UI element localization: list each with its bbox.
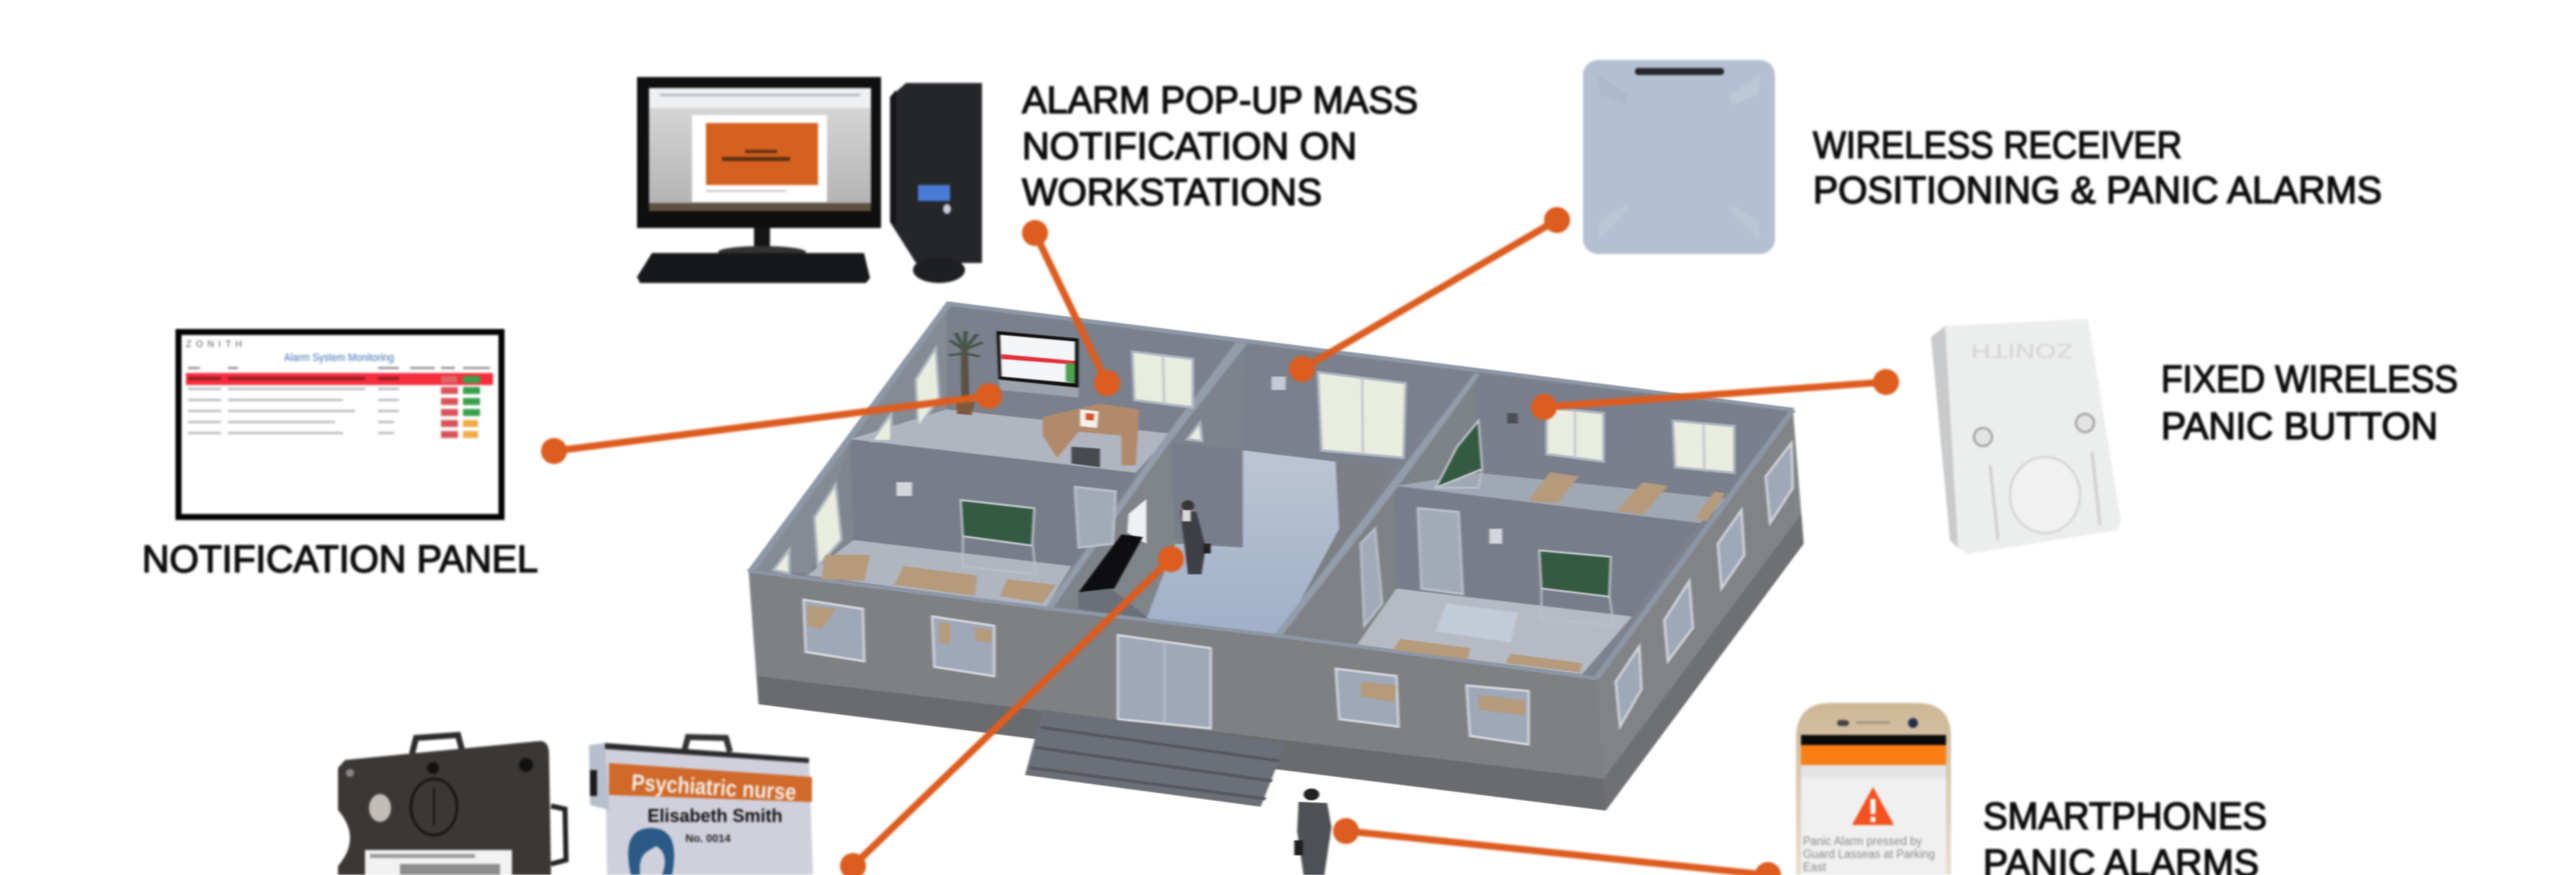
device: fixed wireless panic button	[1931, 319, 2121, 554]
potted plant	[949, 331, 983, 415]
heading: wireless receiver: WIRELESS RECEIVER	[1813, 125, 2182, 167]
monitor	[637, 77, 881, 258]
heading: alarm pop-up mass notification	[1022, 80, 1418, 214]
device: fixed wireless panic button: ZONITH	[1971, 339, 2073, 361]
connector: badges	[840, 546, 1184, 875]
heading: smartphones panic alarms: SMARTPHONES	[1983, 796, 2267, 838]
reception desk	[1043, 404, 1139, 467]
device: wireless receiver	[1583, 60, 1775, 254]
device: white staff badge: Psychiatric nurse	[631, 769, 797, 805]
person in hallway	[1180, 500, 1211, 574]
heading: alarm pop-up mass notification: ALARM POP-UP MASS	[1022, 80, 1418, 122]
desks	[821, 472, 1725, 672]
heading: alarm pop-up mass notification: WORKSTATIONS	[1022, 172, 1322, 214]
badge number: No. 0014	[685, 833, 732, 845]
interior doors	[1075, 487, 1463, 626]
right outer wall	[1594, 409, 1804, 810]
panel: building floor plan	[747, 301, 1804, 875]
alarm table	[186, 367, 493, 438]
phone alert message	[1803, 836, 1935, 874]
connector: notification panel	[541, 383, 1002, 464]
device: desktop computer	[637, 77, 982, 283]
person outside	[1294, 788, 1331, 875]
heading: fixed wireless panic button	[2161, 359, 2458, 448]
heading: notification panel: NOTIFICATION PANEL	[142, 539, 538, 581]
alert icon	[1852, 787, 1894, 825]
hallway railing	[1079, 534, 1149, 618]
heading: wireless receiver: POSITIONING & PANIC ALARMS	[1813, 170, 2382, 212]
keyboard	[637, 253, 870, 283]
phone alert message: East	[1803, 862, 1827, 874]
heading: fixed wireless panic button: FIXED WIRELESS	[2161, 359, 2458, 401]
phone alert message: Panic Alarm pressed by	[1803, 836, 1922, 848]
screen logo: ZONITH	[186, 339, 242, 349]
heading: smartphones panic alarms	[1983, 796, 2267, 875]
avatar	[628, 828, 674, 875]
connector: smartphones	[1333, 818, 1781, 875]
device: smartphone	[1796, 703, 1951, 875]
tower	[890, 83, 982, 263]
heading: alarm pop-up mass notification: NOTIFICATION ON	[1022, 126, 1357, 168]
connector: panic button	[1531, 369, 1899, 420]
heading: wireless receiver	[1813, 125, 2382, 212]
back wall windows	[774, 348, 1734, 574]
heading: fixed wireless panic button: PANIC BUTTON	[2161, 406, 2438, 448]
connector: workstations	[1022, 220, 1120, 396]
connector: wireless receiver	[1289, 207, 1570, 382]
badge role band	[609, 763, 812, 802]
classroom boards	[961, 421, 1614, 626]
device: white staff badge	[589, 737, 813, 875]
device: black badge tag	[338, 735, 566, 875]
panel: notification panel screenshot	[178, 332, 502, 517]
building shell and interior	[749, 301, 1804, 810]
screen title: Alarm System Monitoring	[284, 352, 394, 364]
front wall	[747, 569, 1606, 810]
wall monitor in reception	[996, 331, 1079, 397]
mouse	[913, 257, 965, 283]
entrance stairs	[1025, 710, 1286, 807]
phone alert message: Guard Lasseas at Parking	[1803, 849, 1935, 861]
wall receivers and panic button	[896, 377, 1518, 544]
badge name: Elisabeth Smith	[647, 806, 783, 826]
